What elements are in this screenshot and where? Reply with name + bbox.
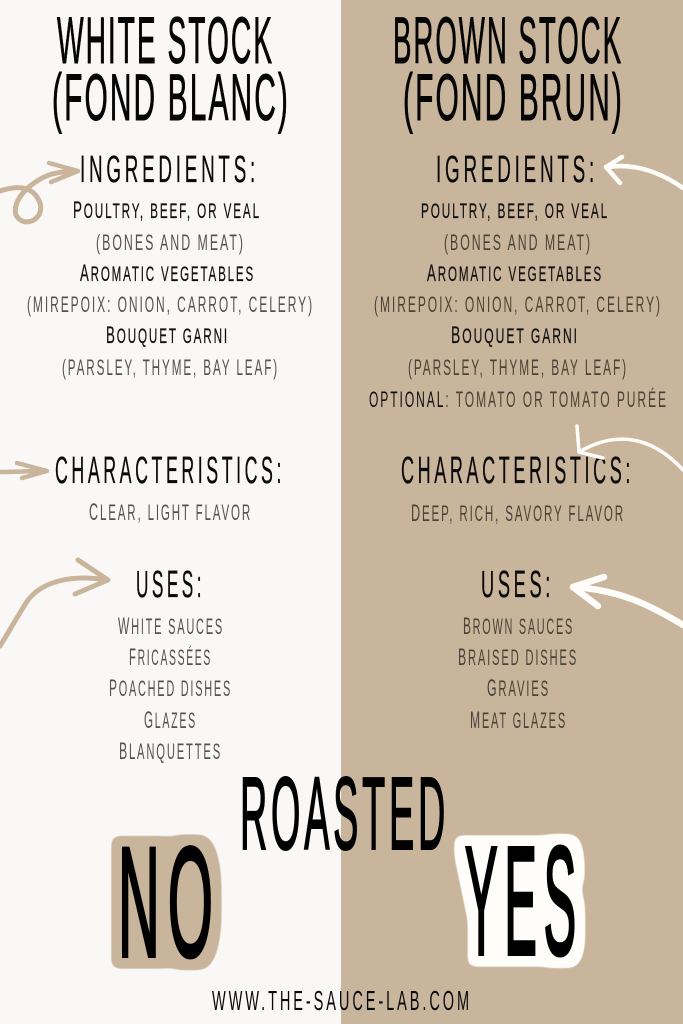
text block: uses list: WHITE SAUCES [118,613,224,640]
text block: ingredient list: BOUQUET GARNI [451,322,579,349]
title: brown stock [393,3,624,134]
panel: white stock column [0,3,314,765]
text block: uses list [109,613,232,765]
panel: white stock column: CHARACTERISTICS: [55,450,285,492]
text block: ingredient list: AROMATIC VEGETABLES [80,260,255,287]
icon: straight arrow to characteristics [0,463,47,478]
text: (FOND BLANC) [52,60,290,134]
text: NO [118,816,221,990]
icon: white arrow to uses [573,577,683,625]
panel: white stock column: USES: [136,564,205,606]
panel: brown stock column [369,3,683,734]
text block: characteristics: CLEAR, LIGHT FLAVOR [89,499,252,526]
text block: uses list: BLANQUETTES [119,738,222,765]
text block: uses list: FRICASSÉES [129,644,212,671]
label: yes with white outline [465,815,583,987]
text block: ingredient list: (PARSLEY, THYME, BAY LEAF) [62,355,279,380]
icon: white arrow to characteristics [577,426,683,470]
text block: ingredient list: (BONES AND MEAT) [96,230,245,255]
text block: ingredient list [369,200,668,412]
title: white stock [52,3,290,134]
text block: ingredient list: (MIREPOIX: ONION, CARROT, CELERY) [27,292,314,317]
panel: white stock column: WHITE STOCK [57,3,274,77]
text block: uses list: BROWN SAUCES [463,613,574,640]
panel: white stock column: INGREDIENTS: [80,149,259,191]
text block: uses list: POACHED DISHES [109,675,232,702]
text block: uses list: GLAZES [144,707,197,734]
text block: uses list [458,613,578,734]
text block: ingredient list: POULTRY, BEEF, OR VEAL [73,197,261,224]
text block: uses list: BRAISED DISHES [458,644,578,671]
icon: white arrow to ingredients [606,157,683,188]
icon: curved arrow to uses [0,560,108,646]
text block: uses list: GRAVIES [487,675,550,702]
text block: ingredient list [27,197,314,380]
text block: ingredient list: BOUQUET GARNI [106,322,229,349]
text block: uses list: MEAT GLAZES [470,707,567,734]
icon: loop arrow to ingredients [0,163,78,222]
panel: brown stock column: USES: [481,564,554,606]
panel: brown stock background [341,0,683,1024]
